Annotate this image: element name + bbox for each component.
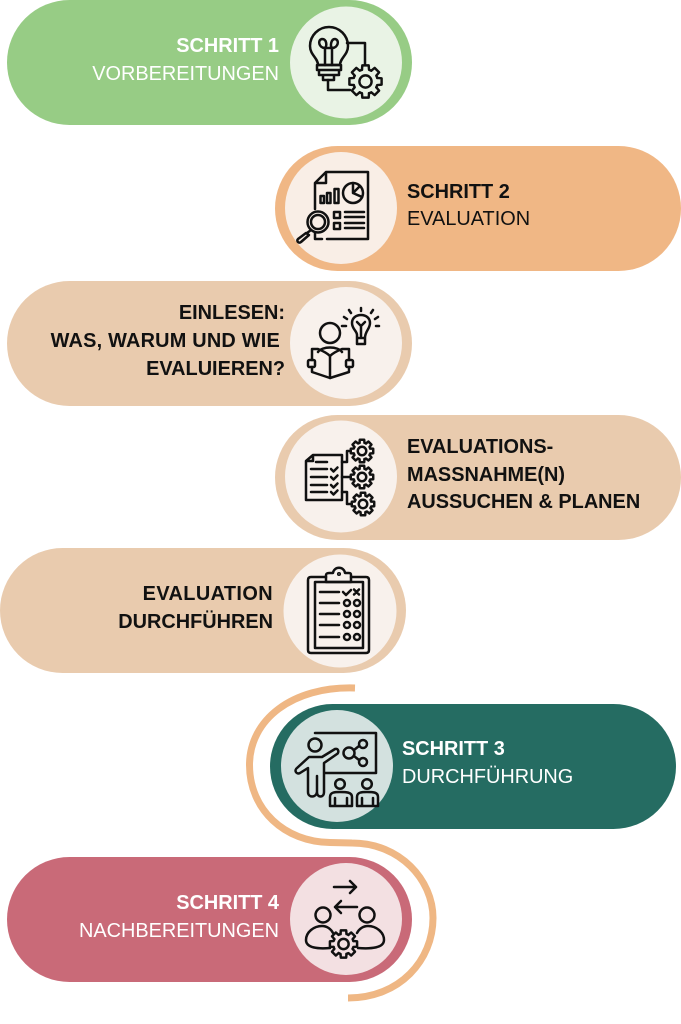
text: Evaluation: EVALUATION (407, 208, 530, 230)
panel: Evaluationsmassnahmen aussuchen und planen (275, 415, 681, 540)
text: Nachbereitungen: NACHBEREITUNGEN (79, 920, 279, 942)
heading: Massnahme(n): MASSNAHME(N) (407, 464, 565, 486)
text: Vorbereitungen: VORBEREITUNGEN (92, 63, 279, 85)
panel: Evaluation durchführen (0, 548, 406, 673)
heading: Schritt 3: SCHRITT 3 (402, 738, 505, 760)
text: Durchführung: DURCHFÜHRUNG (402, 766, 573, 788)
panel: Schritt 3 Durchführung (270, 704, 676, 829)
icon: report with magnifier (297, 172, 368, 243)
heading: Evaluations-: EVALUATIONS- (407, 436, 553, 458)
icon: light bulb and gear (310, 27, 382, 98)
heading: Was, warum und wie: WAS, WARUM UND WIE (51, 330, 280, 352)
icon: checklist with gears (306, 440, 374, 515)
heading: Schritt 1: SCHRITT 1 (176, 35, 279, 57)
heading: Einlesen: EINLESEN: (179, 302, 285, 324)
icon: clipboard checklist (308, 568, 369, 653)
heading: Aussuchen und planen: AUSSUCHEN & PLANEN (407, 491, 640, 513)
icon: reader with light bulb (308, 308, 379, 378)
curved connector line (250, 688, 433, 998)
icon: presenter with audience (296, 733, 378, 806)
panel: Einlesen (7, 281, 412, 406)
icon: two people with gear and arrows (306, 881, 384, 958)
heading: Evaluation: EVALUATION (143, 583, 273, 605)
heading: Evaluieren: EVALUIEREN? (146, 358, 285, 380)
panel: Schritt 4 Nachbereitungen (7, 857, 412, 982)
heading: Schritt 4: SCHRITT 4 (176, 892, 279, 914)
panel: Schritt 1 Vorbereitungen (7, 0, 412, 125)
panel: Schritt 2 Evaluation (275, 146, 681, 271)
heading: Schritt 2: SCHRITT 2 (407, 181, 510, 203)
heading: Durchführen: DURCHFÜHREN (118, 610, 273, 633)
